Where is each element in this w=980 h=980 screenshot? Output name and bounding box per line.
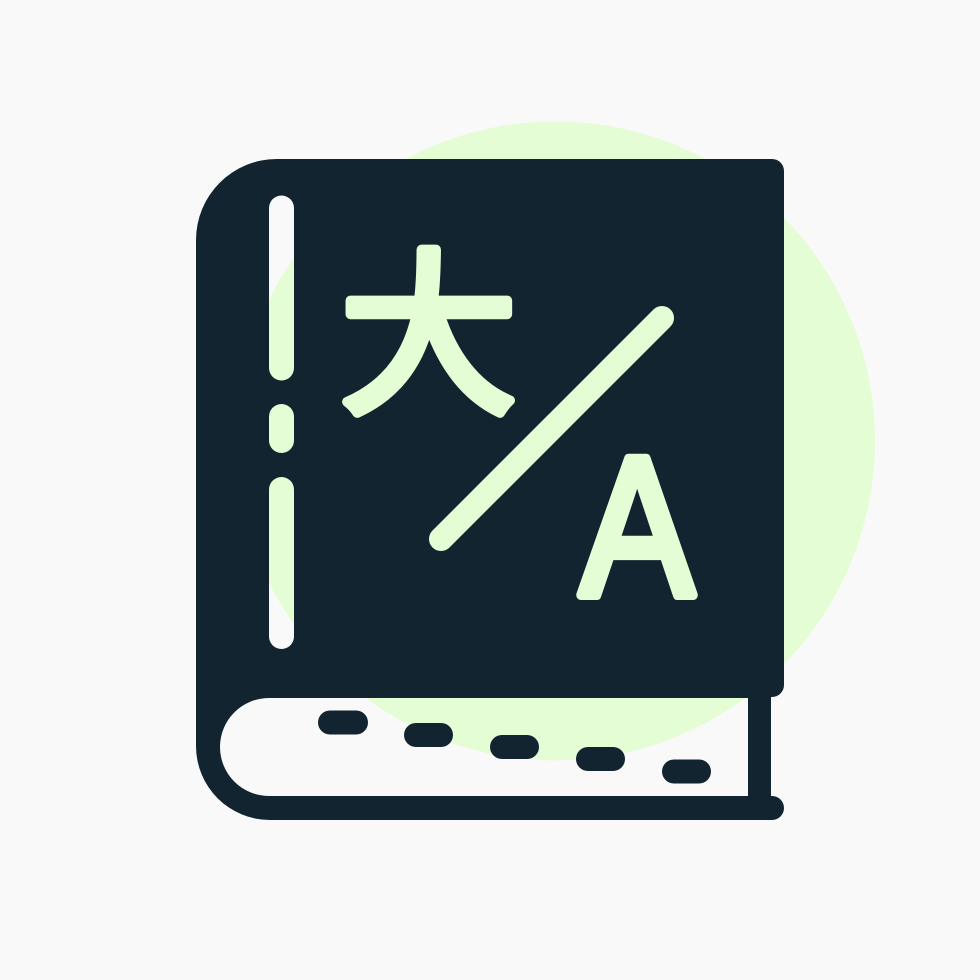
- character: Latin A: A: [580, 417, 694, 638]
- book cover with spine and page cut-outs: [196, 159, 784, 820]
- divider slash: [441, 318, 662, 539]
- page index tabs: [318, 710, 711, 784]
- background circle: [236, 122, 875, 760]
- character: Chinese: 大: [340, 238, 518, 437]
